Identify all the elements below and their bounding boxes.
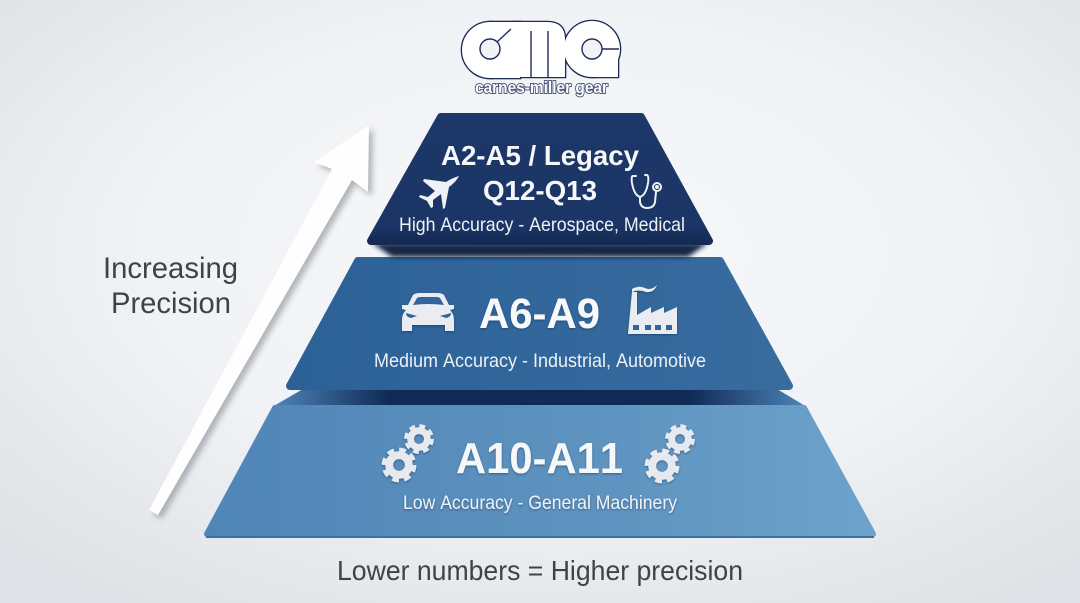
icon: car (402, 293, 454, 331)
caption: High Accuracy: High Accuracy - Aerospace, Medical (399, 214, 685, 236)
tier: medium accuracy A6-A9 (290, 261, 789, 386)
icon: gears left (384, 426, 432, 480)
icon: factory (628, 285, 677, 334)
icon: gears right (647, 426, 693, 481)
logo: carnes-miller gear: carnes-miller gear (475, 78, 608, 97)
heading: Q12-Q13: Q12-Q13 (483, 175, 597, 206)
icon: airplane (419, 176, 459, 209)
tier: high accuracy A2-A5 / Q12-Q13 (371, 117, 709, 257)
caption: Low Accuracy: Low Accuracy - General Machinery (403, 492, 677, 514)
arrow: increasing precision (149, 125, 373, 519)
label: Increasing Precision: Precision (111, 287, 231, 320)
tier: low accuracy A10-A11 (206, 389, 874, 538)
icon: stethoscope (632, 175, 661, 208)
label: Increasing Precision: Increasing (103, 252, 238, 285)
label: Increasing Precision (103, 252, 238, 320)
heading: A6-A9: A6-A9 (479, 290, 600, 338)
heading: A10-A11: A10-A11 (456, 434, 623, 483)
footer note: Lower numbers = Higher precision (337, 555, 743, 586)
heading: A2-A5 / Legacy: A2-A5 / Legacy (441, 140, 639, 171)
caption: Medium Accuracy: Medium Accuracy - Industrial, Automotive (374, 350, 706, 372)
logo: carnes-miller gear (462, 21, 620, 97)
